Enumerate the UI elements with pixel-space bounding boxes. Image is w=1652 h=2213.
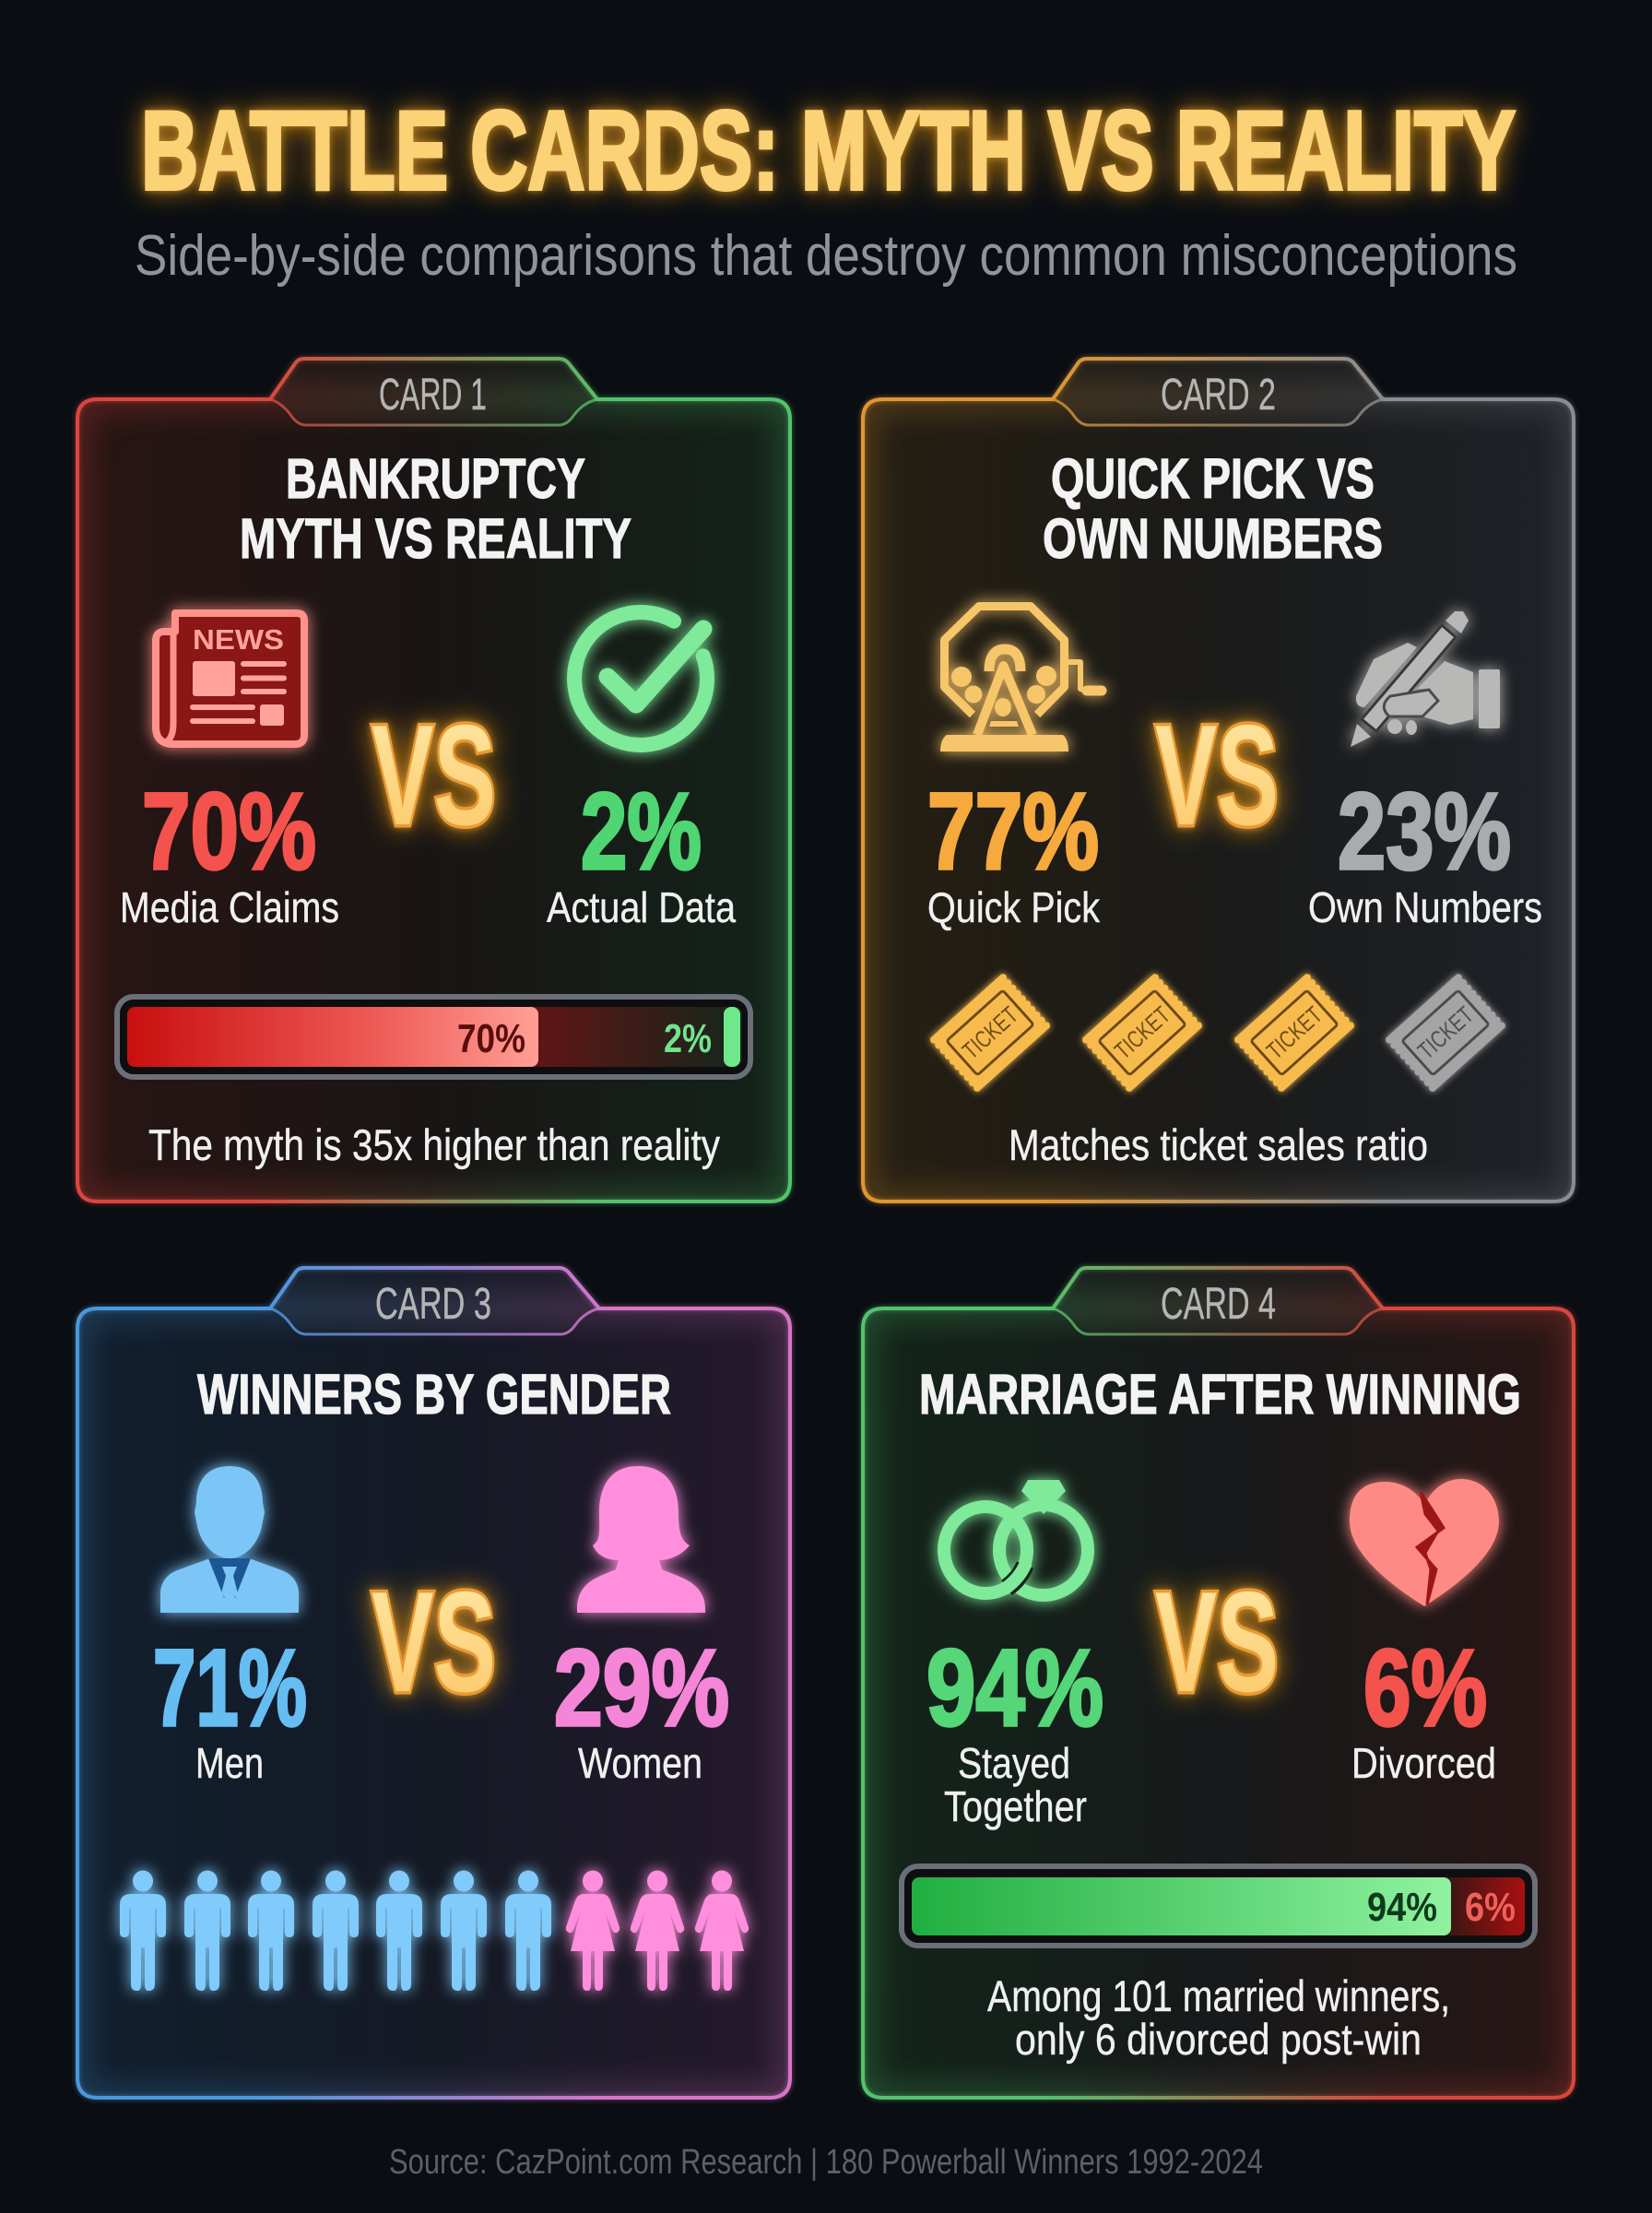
bar chart: 94 vs 6: 94% [1367,1885,1437,1930]
card heading: QUICK PICK VS [1051,447,1375,510]
card heading: BANKRUPTCY [286,447,585,510]
icon: woman [577,1466,705,1613]
stat: actual data 2%: 2% [581,771,702,893]
panel: card 2 quick pick [863,359,1574,1201]
bar chart: 70 vs 2: 70% [457,1016,525,1061]
icon: ticket 1 [928,973,1052,1093]
icon: ticket 3: TICKET [1261,1000,1328,1065]
caption: Matches ticket sales ratio [1009,1120,1428,1169]
icon: ticket 1: TICKET [957,1000,1023,1065]
icon: check circle [574,612,707,745]
stat: stayed together 94%: 94% [926,1627,1103,1749]
panel: card 1 bankruptcy [77,359,790,1201]
caption [987,1971,1450,2064]
icon: ticket 3 [1233,973,1356,1093]
icon: ticket 2: TICKET [1109,1000,1175,1065]
icon: newspaper [156,613,304,744]
label: women: Women [578,1739,702,1787]
source footer: Source: CazPoint.com Research | 180 Powerball Winners 1992-2024 [389,2143,1263,2182]
stat: own numbers 23%: 23% [1338,771,1511,893]
icon: broken heart [1350,1479,1499,1606]
icon: ticket 2 [1080,973,1204,1093]
label: men: Men [195,1739,264,1787]
label: actual data: Actual Data [547,883,736,931]
stat: quick pick 77%: 77% [927,771,1099,893]
icon: wedding rings [944,1480,1088,1595]
label: divorced: Divorced [1351,1739,1496,1787]
caption: The myth is 35x higher than reality [148,1120,720,1169]
card heading: MYTH VS REALITY [240,507,631,570]
pictogram row: 7 men 3 women [120,1870,749,1991]
bar chart: 94 vs 6: 6% [1465,1885,1516,1930]
label: media claims: Media Claims [120,883,339,931]
bar chart: 70 vs 2 [117,997,750,1077]
label: quick pick: Quick Pick [927,883,1101,931]
card tab label: CARD 1 [379,371,487,420]
card tab label: CARD 4 [1161,1280,1276,1329]
panel: card 3 gender [77,1268,790,2098]
bar chart: 70 vs 2: 2% [664,1016,712,1061]
card heading [240,447,631,570]
label: stayed together: Together [944,1782,1087,1830]
icon: hand writing [1351,611,1500,747]
icon: newspaper: NEWS [193,623,284,656]
vs badge: VS [1155,1562,1279,1722]
panel: card 4 marriage [863,1268,1574,2098]
vs badge: VS [372,1562,496,1722]
label: stayed together [944,1739,1087,1830]
icon: man [160,1466,299,1613]
caption: only 6 divorced post-win [1015,2015,1422,2064]
label: own numbers: Own Numbers [1308,883,1542,931]
stat: men 71%: 71% [153,1627,307,1749]
card heading: OWN NUMBERS [1043,507,1383,570]
stat: divorced 6%: 6% [1363,1627,1487,1749]
vs badge: VS [372,695,496,855]
caption: Among 101 married winners, [987,1971,1450,2020]
stat: media claims 70%: 70% [142,771,316,893]
card heading [1043,447,1383,570]
card heading: WINNERS BY GENDER [197,1363,671,1426]
bar chart: 94 vs 6 [902,1866,1535,1946]
stat: women 29%: 29% [554,1627,729,1749]
label: stayed together: Stayed [958,1739,1070,1787]
card tab label: CARD 3 [375,1280,491,1329]
icon: ticket 4 [1384,973,1507,1093]
icon: lottery machine [940,607,1102,751]
card tab label: CARD 2 [1161,371,1276,420]
vs badge: VS [1155,695,1279,855]
icon: ticket 4: TICKET [1412,1000,1479,1065]
